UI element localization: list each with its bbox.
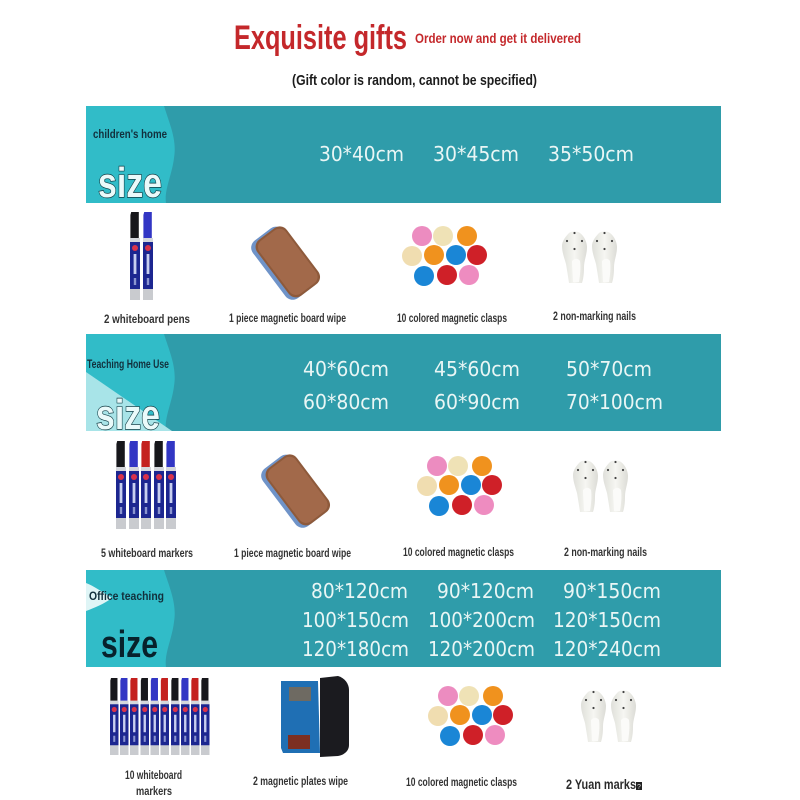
caption: wipe: 1 piece magnetic board wipe [234,546,351,560]
icon: magnetic plate wipe [281,676,349,757]
size options: 80*120cm [311,579,408,603]
label: children's home: children's home [93,127,167,141]
caption: markers: 10 whiteboard [125,768,182,782]
label: teaching home use: Teaching Home Use [87,357,169,371]
size word: size [98,159,162,206]
size options: 70*100cm [566,390,663,414]
caption: magnets: 10 colored magnetic clasps [406,775,517,789]
size options: 120*200cm [428,637,535,661]
size options: 120*240cm [553,637,661,661]
size options: 45*60cm [434,357,520,381]
panel: children's home gifts [104,212,636,326]
size options [319,142,634,166]
panel: children's home banner [86,106,721,206]
icon: board wipe [258,449,334,531]
caption: pens: 2 whiteboard pens [104,312,190,326]
icon: magnets [417,456,502,516]
icon: hooks [562,232,617,283]
size options: 50*70cm [566,357,652,381]
caption: wipe: 2 magnetic plates wipe [253,774,348,788]
note: gift color: (Gift color is random, cannot be specified) [292,72,537,89]
label: office teaching: Office teaching [89,589,164,603]
size options: 30*40cm [319,142,404,166]
size options: 90*150cm [563,579,661,603]
panel: office teaching banner [86,570,721,667]
size options [302,579,661,661]
size options: 35*50cm [548,142,634,166]
caption: nails: 2 non-marking nails [553,309,636,323]
caption: markers: markers [136,784,172,798]
subtitle: order now: Order now and get it delivered [415,30,581,46]
size options: 30*45cm [433,142,519,166]
icon: board wipe [248,221,324,303]
caption: markers [125,768,182,798]
size options [303,357,663,414]
size options: 100*200cm [428,608,535,632]
caption: marks: 2 Yuan marks [566,776,636,792]
icon: 2 whiteboard pens [130,212,153,300]
caption: nails: 2 non-marking nails [564,545,647,559]
size options: 100*150cm [302,608,409,632]
icon: hooks [581,690,636,742]
icon: magnets [428,686,513,746]
size options: 60*90cm [434,390,520,414]
size word: size [96,391,160,438]
panel: office teaching gifts [110,676,642,798]
size options: 120*150cm [553,608,661,632]
caption: magnets: 10 colored magnetic clasps [397,311,507,325]
panel: teaching home use gifts [101,441,647,560]
title: Exquisite gifts [234,19,407,57]
icon: 10 whiteboard markers [110,678,210,755]
caption: markers: 5 whiteboard markers [101,546,193,560]
size options: 90*120cm [437,579,534,603]
caption: marks: ? [637,784,641,791]
icon: 5 whiteboard markers [116,441,176,529]
size word: size [101,624,158,666]
caption: magnets: 10 colored magnetic clasps [403,545,514,559]
panel: teaching home use banner [86,334,721,438]
caption: wipe: 1 piece magnetic board wipe [229,311,346,325]
size options: 60*80cm [303,390,389,414]
size options: 120*180cm [302,637,409,661]
icon: magnets [402,226,487,286]
icon: hooks [573,460,628,512]
size options: 40*60cm [303,357,389,381]
